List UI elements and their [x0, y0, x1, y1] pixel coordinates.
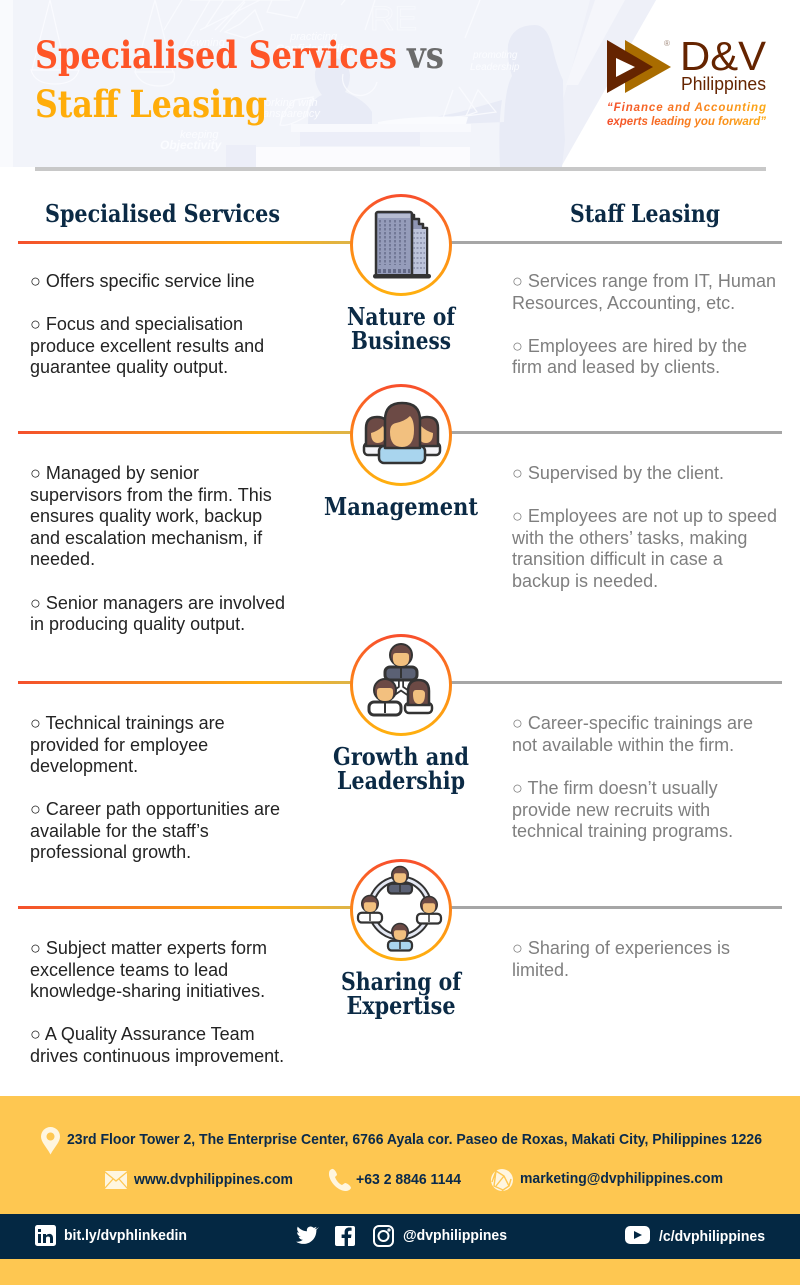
- label: sharing of expertise: Sharing of: [341, 967, 462, 996]
- icon: phone: [329, 1169, 351, 1191]
- text: staff leasing, growth: not available within the firm.: [512, 735, 734, 755]
- icon: twitter: [296, 1227, 319, 1244]
- icon: linkedin: [35, 1225, 56, 1246]
- text: specialised services, management: ○ Managed by senior: [30, 463, 199, 483]
- panel: sharing of expertise: [18, 860, 782, 1066]
- text: specialised services, expertise: excellence teams to lead: [30, 960, 228, 980]
- text: staff leasing, management: ○ Supervised by the client.: [512, 463, 724, 483]
- text: staff leasing, nature of business: ○ Services range from IT, Human: [512, 271, 776, 291]
- header banner: [0, 0, 656, 167]
- linkedin url: bit.ly/dvphlinkedin: [64, 1227, 187, 1244]
- column heading: Staff Leasing: Staff Leasing: [570, 199, 720, 228]
- logo: D&V Philippines: “Finance and Accounting: [607, 102, 766, 114]
- email: marketing@dvphilippines.com: [520, 1170, 723, 1187]
- header banner: practicing: [289, 31, 338, 43]
- column heading: Specialised Services: Specialised Services: [45, 199, 280, 228]
- header banner: Confidentiality: [276, 43, 353, 55]
- text: staff leasing, nature of business: ○ Employees are hired by the: [512, 336, 747, 356]
- text: staff leasing, nature of business: Resources, Accounting, etc.: [512, 293, 735, 313]
- icon: hierarchy of people: [369, 643, 432, 715]
- text: specialised services, growth: ○ Technical trainings are: [30, 713, 225, 733]
- title: [35, 33, 444, 126]
- text: specialised services, nature of business: ○ Offers specific service line: [30, 271, 255, 291]
- label: management: Management: [324, 492, 478, 521]
- text: specialised services, management: and escalation mechanism, if: [30, 528, 263, 548]
- text: specialised services, expertise: drives continuous improvement.: [30, 1046, 284, 1066]
- icon: location pin: [41, 1127, 60, 1154]
- text: specialised services, growth: provided for employee: [30, 735, 208, 755]
- label: nature of business: Nature of: [347, 302, 456, 331]
- header banner: owning: [190, 37, 226, 49]
- header banner: Objectivity: [160, 138, 223, 152]
- phone number: +63 2 8846 1144: [356, 1171, 462, 1188]
- icon: office building: [373, 212, 431, 278]
- text: specialised services, expertise: ○ A Quality Assurance Team: [30, 1024, 255, 1044]
- header banner: ansparency: [263, 108, 321, 120]
- text: staff leasing, growth: technical training programs.: [512, 821, 733, 841]
- text: staff leasing, nature of business: firm and leased by clients.: [512, 357, 720, 377]
- footer: social band: [0, 1214, 800, 1259]
- text: specialised services, growth: professional growth.: [30, 842, 191, 862]
- text: specialised services, nature of business: produce excellent results and: [30, 336, 264, 356]
- text: specialised services, management: supervisors from the firm. This: [30, 485, 272, 505]
- text: staff leasing, management: backup is needed.: [512, 571, 658, 591]
- logo: D&V Philippines: [607, 33, 767, 128]
- text: specialised services, growth: ○ Career path opportunities are: [30, 799, 280, 819]
- youtube channel: /c/dvphilippines: [659, 1228, 765, 1245]
- text: staff leasing, expertise: limited.: [512, 960, 569, 980]
- icon: team of three women: [364, 403, 440, 463]
- label: nature of business: Business: [351, 326, 451, 355]
- text: staff leasing, expertise: ○ Sharing of experiences is: [512, 938, 730, 958]
- header banner: Leadership: [470, 62, 520, 73]
- logo: D&V Philippines: Philippines: [681, 74, 766, 94]
- text: staff leasing, management: ○ Employees are not up to speed: [512, 506, 777, 526]
- text: staff leasing, growth: provide new recruits with: [512, 800, 710, 820]
- logo: D&V Philippines: D&V: [680, 33, 767, 79]
- icon: facebook: [335, 1226, 355, 1246]
- panel: growth and leadership: [18, 636, 782, 862]
- icon: instagram: [374, 1226, 393, 1246]
- logo: D&V Philippines: ®: [664, 39, 670, 48]
- text: staff leasing, management: with the others’ tasks, making: [511, 528, 747, 548]
- title: Staff Leasing: [35, 82, 267, 126]
- header banner: RE: [370, 0, 417, 38]
- icon: youtube: [625, 1226, 650, 1244]
- title: Specialised Services: [35, 33, 397, 77]
- panel: management: [18, 386, 782, 634]
- icon: globe: [491, 1169, 513, 1191]
- text: specialised services, expertise: ○ Subject matter experts form: [30, 938, 267, 958]
- text: specialised services, management: ensures quality work, backup: [30, 506, 262, 526]
- text: staff leasing, growth: ○ The firm doesn’t usually: [512, 778, 718, 798]
- header banner: promoting: [472, 50, 518, 61]
- text: staff leasing, growth: ○ Career-specific trainings are: [512, 713, 753, 733]
- social handle: @dvphilippines: [403, 1227, 507, 1244]
- label: sharing of expertise: Expertise: [346, 991, 456, 1020]
- text: specialised services, nature of business: guarantee quality output.: [30, 357, 228, 377]
- text: specialised services, growth: development.: [30, 756, 138, 776]
- header banner: keeping: [180, 129, 219, 141]
- header banner: orking with: [265, 97, 318, 109]
- text: specialised services, growth: available for the staff’s: [30, 821, 209, 841]
- text: specialised services, nature of business: ○ Focus and specialisation: [30, 314, 243, 334]
- website: www.dvphilippines.com: [133, 1171, 293, 1188]
- icon: envelope: [105, 1171, 127, 1189]
- title: vs: [406, 33, 444, 77]
- text: specialised services, management: in producing quality output.: [30, 614, 245, 634]
- icon: circle of people: [358, 866, 441, 950]
- footer: contact band: [0, 1096, 800, 1285]
- text: specialised services, expertise: knowledge-sharing initiatives.: [30, 981, 265, 1001]
- text: staff leasing, management: transition difficult in case a: [512, 549, 724, 569]
- text: specialised services, management: ○ Senior managers are involved: [30, 593, 285, 613]
- address: 23rd Floor Tower 2, The Enterprise Center, 6766 Ayala cor. Paseo de Roxas, Makati City, Philippines 1226: [67, 1131, 762, 1148]
- logo: D&V Philippines: experts leading you forward”: [607, 116, 766, 128]
- panel: nature of business: [18, 196, 782, 377]
- text: specialised services, management: needed.: [30, 549, 95, 569]
- label: growth and leadership: Growth and: [333, 742, 469, 771]
- label: growth and leadership: Leadership: [337, 766, 465, 795]
